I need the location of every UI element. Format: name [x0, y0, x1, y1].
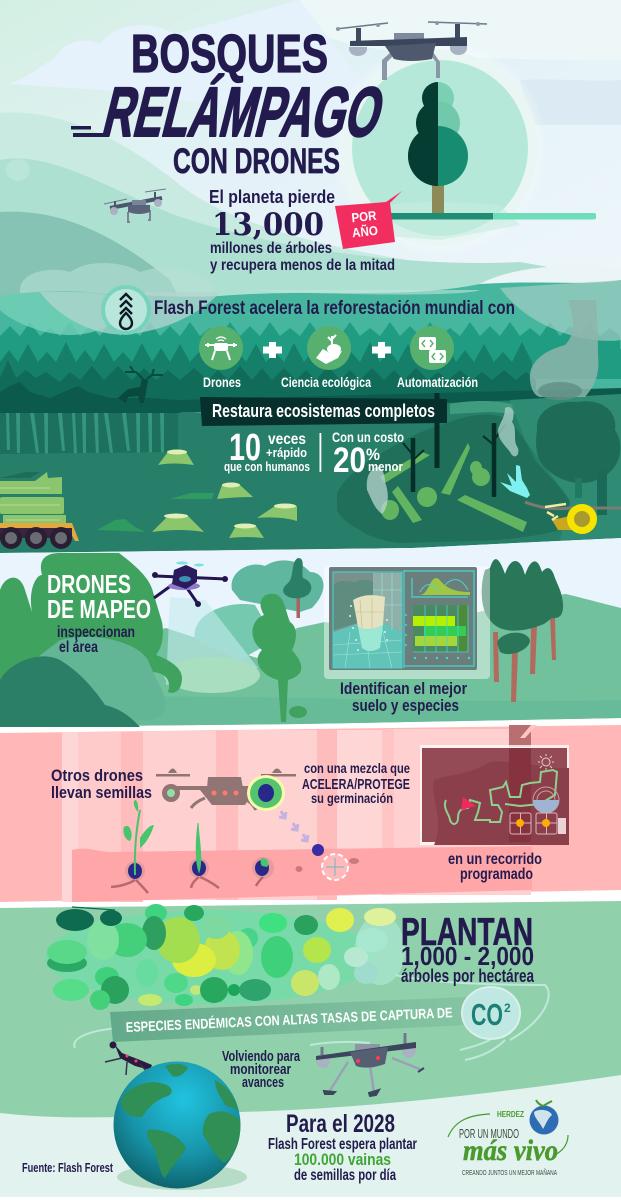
title line: con drones: CON DRONES — [173, 142, 340, 181]
drones de mapeo text — [47, 569, 151, 656]
treeline far — [0, 322, 620, 350]
flag: por año: POR — [351, 208, 378, 225]
drones de mapeo text: DRONES — [47, 569, 131, 599]
flag: por año — [335, 191, 402, 249]
section: forest background — [0, 280, 621, 553]
3D soil plot — [333, 572, 402, 668]
title — [71, 24, 391, 181]
fallen logs — [380, 443, 527, 532]
icon row — [199, 326, 478, 390]
left trees — [0, 553, 182, 727]
radar — [533, 787, 559, 813]
ground bar — [386, 213, 596, 220]
icon labels: Drones — [203, 374, 241, 390]
icon labels: Automatización — [397, 374, 478, 390]
logo: por un mundo más vivo — [448, 1100, 568, 1177]
mix text: su germinación — [311, 791, 393, 806]
dark canopy patches — [56, 909, 122, 931]
stat: ten times faster — [224, 427, 310, 474]
panel: mapping drones — [0, 538, 621, 727]
falling seed — [312, 844, 324, 856]
yellow nozzle — [545, 504, 597, 534]
plantan headline — [401, 911, 535, 986]
small dark drone on globe — [105, 1042, 152, 1075]
banner: restaura ecosistemas — [200, 397, 447, 426]
CO2 badge: 2 — [504, 1001, 511, 1015]
stat: ten times faster: +rápido — [266, 445, 307, 460]
trunk — [432, 178, 444, 214]
flash forest headline: Flash Forest acelera la reforestación mundial con — [154, 298, 515, 319]
treeline middle — [0, 342, 532, 385]
stumps and grass — [97, 450, 297, 538]
stat: ten times faster: veces — [268, 431, 306, 448]
smoke, large — [530, 300, 598, 397]
scanned patch — [164, 657, 260, 693]
stat lead-in: El planeta pierde — [209, 187, 335, 207]
small tree — [283, 558, 311, 618]
plantan headline: 1,000 - 2,000 — [401, 941, 534, 971]
logo text: HERDEZ — [497, 1110, 524, 1119]
tree in circle — [352, 60, 596, 240]
stat: ten times faster: que con humanos — [224, 460, 310, 474]
stat: twenty percent cheaper: 20 — [333, 441, 366, 480]
route — [445, 770, 557, 824]
stand of trunks — [0, 413, 178, 455]
truck bed — [0, 523, 79, 541]
drone scan beam — [166, 597, 258, 685]
logo: por un mundo más vivo: CREANDO JUNTOS UN MEJOR MAÑANA — [462, 1168, 557, 1177]
stat: twenty percent cheaper: Con un costo — [332, 430, 404, 445]
stat text: millones de árboles — [210, 240, 332, 257]
hills — [0, 594, 621, 727]
pebbles — [296, 858, 359, 872]
panel: seed drones — [0, 725, 621, 902]
monitoring text: Volviendo para — [222, 1048, 300, 1065]
stat: twenty percent cheaper: menor — [368, 460, 403, 474]
plantan headline: PLANTAN — [401, 911, 533, 954]
plus — [372, 342, 391, 358]
speed dashes — [71, 126, 106, 137]
drones de mapeo text: inspeccionan — [57, 624, 135, 641]
seed pod — [247, 775, 285, 811]
monitoring drone — [316, 1033, 424, 1096]
plus — [263, 342, 282, 358]
monitoring text: avances — [242, 1074, 284, 1091]
sun — [538, 754, 554, 770]
goal 2028 — [268, 1110, 417, 1184]
plant: sprout — [252, 857, 274, 886]
icon labels — [203, 374, 478, 390]
plantan headline: árboles por hectárea — [401, 966, 535, 986]
icon: drones — [199, 326, 243, 370]
burnt area — [337, 300, 621, 543]
target marker — [322, 854, 348, 880]
ground — [0, 396, 621, 553]
foliage: top-down tree canopy — [45, 904, 405, 1010]
section: header sky and hills — [0, 0, 621, 300]
seed drones text: Otros drones — [51, 766, 143, 785]
route caption: programado — [460, 866, 533, 883]
title line: Bosques: BOSQUES — [131, 24, 328, 84]
CO2 badge: CO — [471, 997, 503, 1032]
plant: medium — [189, 823, 219, 888]
mapping drone — [152, 562, 228, 607]
mix text — [302, 761, 410, 806]
logo: por un mundo más vivo: POR UN MUNDO — [459, 1126, 519, 1141]
icon: automation — [410, 326, 454, 370]
bar chart — [405, 605, 470, 659]
stat: ten times faster: 10 — [229, 427, 261, 469]
drones de mapeo text: el área — [59, 639, 98, 656]
decorative trunks — [62, 729, 531, 902]
icon: flash forest logo — [101, 285, 151, 335]
background trees — [536, 401, 620, 515]
header: flash forest — [101, 285, 515, 335]
log stack — [0, 472, 66, 524]
globe — [114, 1062, 247, 1190]
logo: por un mundo más vivo: más vivo — [463, 1134, 558, 1167]
source: Fuente: Flash Forest — [22, 1161, 114, 1175]
water spray — [500, 465, 530, 498]
icon: ecological science — [307, 326, 351, 370]
stat: twenty percent cheaper — [332, 430, 404, 480]
seed drones text — [51, 766, 152, 802]
stat: trees lost — [209, 187, 395, 274]
caption: best soil — [340, 679, 467, 715]
seed fall arrows — [279, 811, 308, 841]
hose — [525, 502, 621, 509]
main drone — [336, 21, 487, 80]
tree crown — [408, 82, 468, 186]
caption: best soil: suelo y especies — [352, 696, 459, 715]
stat number: 13,000 — [212, 207, 324, 243]
seed drone — [156, 768, 296, 810]
small drone — [104, 189, 166, 222]
goal 2028: de semillas por día — [294, 1167, 396, 1184]
banner: restaura ecosistemas: Restaura ecosistemas completos — [212, 401, 435, 421]
goal 2028: 100.000 vainas — [294, 1151, 391, 1169]
deer silhouette — [118, 366, 163, 403]
icon labels: Ciencia ecológica — [281, 374, 371, 390]
stat: trees lost: y recupera menos de la mitad — [210, 257, 395, 274]
caption: best soil: Identifican el mejor — [340, 679, 467, 698]
stat: twenty percent cheaper: % — [366, 445, 380, 464]
goal 2028: Flash Forest espera plantar — [268, 1136, 417, 1153]
continents — [121, 1064, 240, 1178]
banner: endemic species: ESPECIES ENDÉMICAS CON ALTAS TASAS DE CAPTURA DE — [125, 1004, 453, 1035]
divider — [320, 433, 321, 472]
burnt trees — [403, 393, 505, 497]
panel: planting — [0, 901, 621, 1197]
dark band — [0, 382, 180, 413]
mix text: ACELERA/PROTEGE — [302, 776, 410, 793]
swirl lines — [74, 975, 549, 1060]
seed drones text: llevan semillas — [51, 783, 152, 802]
plant: tall — [111, 800, 154, 893]
title line: Relámpago: RELÁMPAGO — [96, 74, 391, 152]
flight route map — [420, 725, 569, 845]
lower pale area — [0, 1075, 621, 1197]
flag: por año: AÑO — [351, 223, 379, 240]
route caption: en un recorrido — [448, 851, 542, 868]
route caption — [448, 851, 542, 883]
monitoring text — [222, 1048, 300, 1091]
position marker — [461, 797, 476, 810]
monitoring text: monitorear — [230, 1061, 291, 1078]
log truck — [0, 472, 79, 549]
grass patches — [170, 493, 214, 499]
logo swoosh — [448, 1114, 568, 1155]
distant bush — [232, 560, 324, 612]
map controls — [510, 813, 566, 834]
mix text: con una mezcla que — [304, 761, 410, 776]
distribution chart — [412, 578, 470, 597]
logo globe — [530, 1100, 558, 1134]
drones de mapeo text: DE MAPEO — [47, 594, 151, 624]
clouds over forest — [0, 292, 130, 335]
right trees — [482, 559, 563, 702]
CO2 badge — [462, 987, 520, 1039]
smoke wisps — [367, 467, 388, 514]
panel: analysis screen — [324, 566, 490, 679]
tall tree — [252, 594, 301, 722]
wheels — [0, 527, 72, 549]
ground — [72, 846, 532, 902]
treeline near — [0, 360, 536, 405]
banner: endemic species — [110, 997, 467, 1042]
goal 2028: Para el 2028 — [286, 1110, 395, 1138]
